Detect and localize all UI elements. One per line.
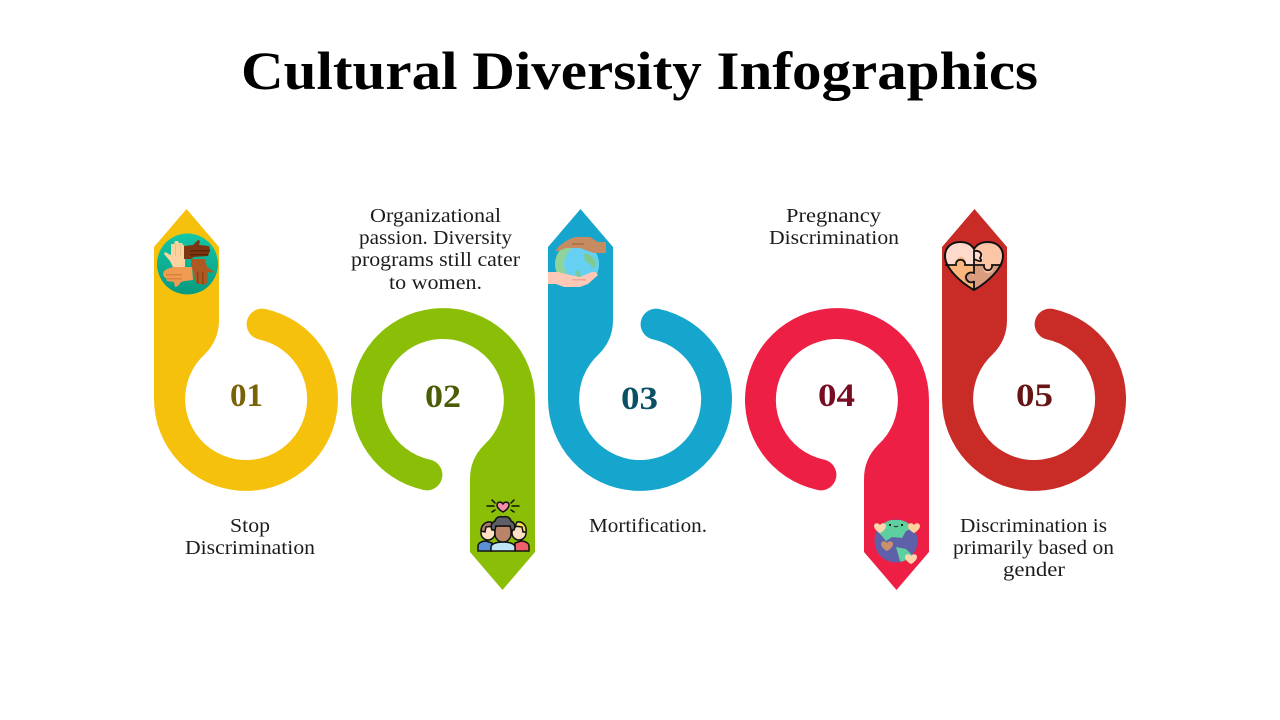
step 01: yellow ribbon <box>154 209 338 491</box>
text: step 02: Organizational <box>370 206 502 227</box>
number 05: 05 <box>1016 378 1053 414</box>
step 04: pink-red ribbon <box>745 308 929 590</box>
text: step 01: Stop <box>230 516 270 537</box>
number 02: 02 <box>425 379 461 415</box>
step 02: green ribbon <box>351 308 535 590</box>
text: step 05 <box>953 516 1114 581</box>
icon: four joined hands <box>157 234 218 294</box>
text: step 05: primarily based on <box>953 538 1114 559</box>
title: Cultural Diversity Infographics <box>241 41 1038 101</box>
icon: hands holding globe <box>548 237 606 287</box>
step 03: blue ribbon <box>548 209 732 491</box>
text: step 03: Mortification. <box>589 516 707 537</box>
text: step 05: gender <box>1003 560 1066 581</box>
text: step 02: programs still cater <box>351 250 521 271</box>
text: step 01: Discrimination <box>185 538 315 559</box>
text: step 02: passion. Diversity <box>359 228 512 249</box>
text: step 04: Discrimination <box>769 228 899 249</box>
text: step 04 <box>769 206 899 249</box>
number 01: 01 <box>230 378 263 414</box>
icon: globe with hearts <box>874 520 920 565</box>
text: step 02 <box>351 206 521 294</box>
step 05: dark red ribbon <box>942 209 1126 491</box>
text: step 02: to women. <box>389 273 482 294</box>
text: step 05: Discrimination is <box>960 516 1107 537</box>
number 04: 04 <box>818 378 855 414</box>
text: step 01 <box>185 516 315 559</box>
icon: puzzle heart <box>944 241 1004 291</box>
icon: people with heart <box>478 500 529 551</box>
number 03: 03 <box>621 381 658 417</box>
text: step 04: Pregnancy <box>786 206 881 227</box>
